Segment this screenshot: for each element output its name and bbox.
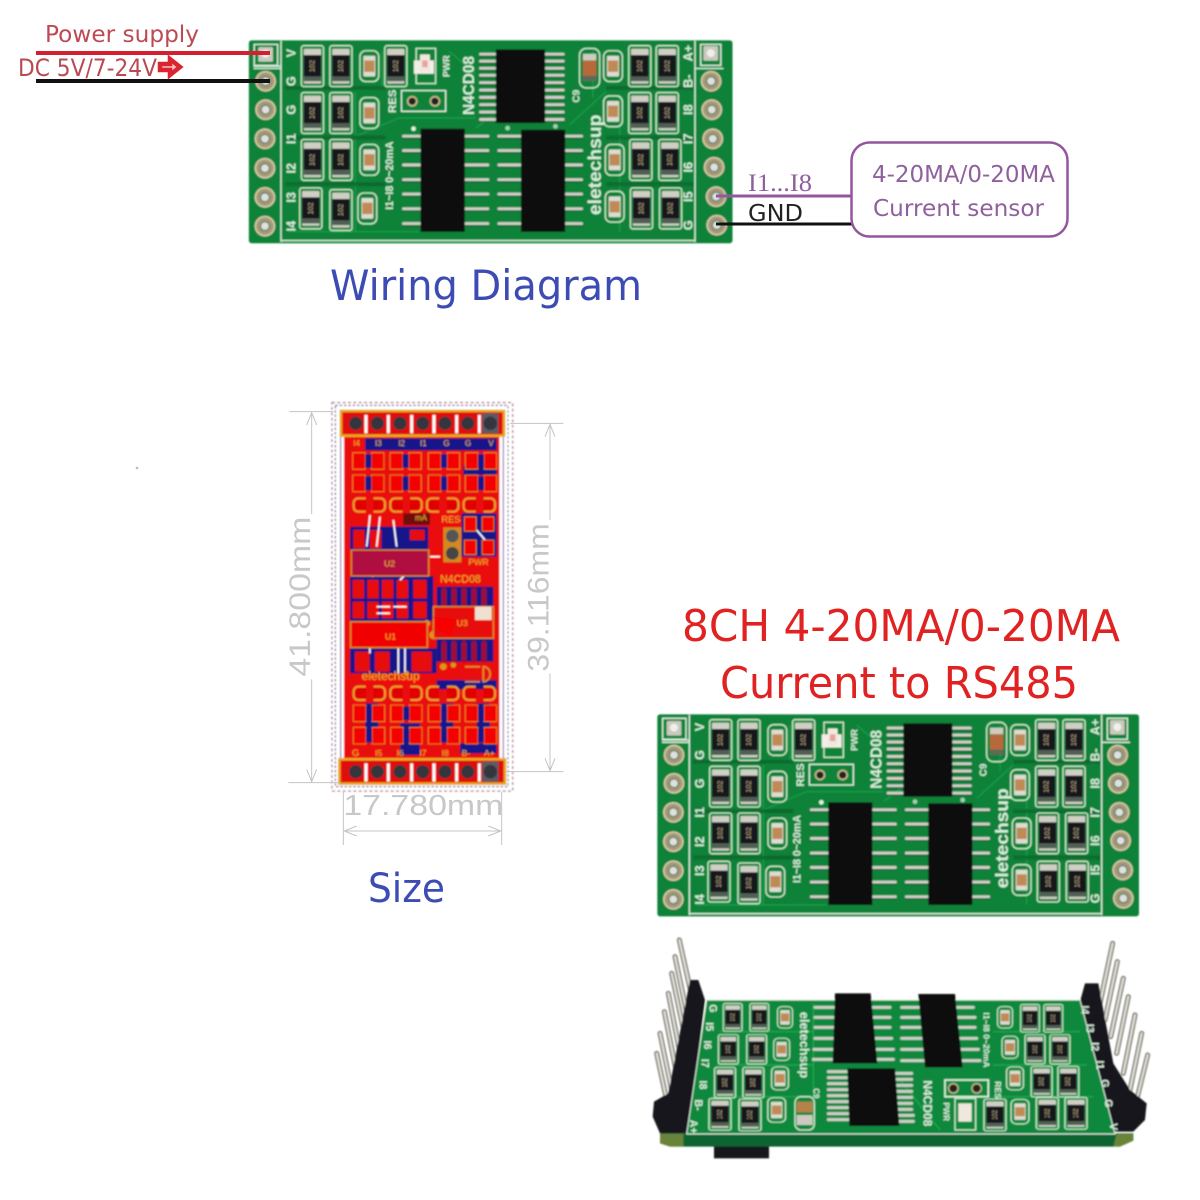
board edge [660,1133,1133,1147]
board labels: I3 [693,865,707,876]
left header block [653,980,705,1133]
voltage label: DC 5V/7-24V [18,54,158,82]
silkscreen labels: I7 [681,133,696,144]
layout silkscreen text: I7 [419,748,427,758]
pin rows [657,940,1148,1103]
board surface [687,1000,1115,1134]
perspective board labels: RES [993,1081,1003,1099]
sensor box [852,142,1068,236]
layout silkscreen text: RES [441,515,461,525]
board labels: I6 [1088,835,1102,846]
dimension lines [288,412,563,845]
IC chips [813,993,980,1126]
silkscreen labels: B- [681,75,696,88]
silkscreen labels: I5 [681,191,696,202]
perspective board labels: A+ [687,1120,699,1134]
pcb layout size drawing [284,403,563,845]
silkscreen labels: eletechsup [585,115,605,215]
photo: board perspective view with pin headers [653,940,1148,1158]
board labels: I5 [1088,865,1102,875]
perspective board labels: B- [692,1099,704,1111]
layout silkscreen text: I1 [420,439,427,448]
layout silkscreen text: N4CD08 [440,574,481,586]
connector under board [714,1145,769,1158]
perspective board labels: I4 [1079,1006,1091,1015]
layout silkscreen text: I8 [442,748,449,758]
silkscreen labels: N4CD08 [461,56,478,115]
layout silkscreen text: U1 [385,631,396,641]
layout silkscreen text: G [352,748,359,758]
silkscreen labels: I8 [681,104,696,115]
blocks over navy [353,530,432,672]
layout silkscreen text [352,439,495,758]
perspective board labels: I6 [701,1041,713,1050]
perspective board labels: C9 [811,1088,820,1099]
perspective board labels: V [1107,1123,1119,1131]
perspective board labels: I1~I8 0~20mA [981,1012,991,1068]
silkscreen labels: I4 [284,221,299,231]
red power wire [36,51,270,55]
board labels: I7 [1088,807,1102,818]
layout silkscreen text: I3 [375,439,382,448]
layout silkscreen text: A+ [484,748,495,758]
layout silkscreen text: I6 [397,748,404,758]
silkscreen labels: I3 [284,192,299,203]
layout silkscreen text: I5 [375,748,382,758]
photo: board top view [657,714,1139,916]
board labels: A+ [1088,719,1102,735]
silkscreen labels: G [284,105,299,115]
layout silkscreen text: U3 [457,618,468,628]
dimension: 17.780mm: 17.780mm [343,790,503,822]
silkscreen labels: I1~I8 0~20mA [384,141,396,210]
layout silkscreen text: mA [415,514,428,523]
layout silkscreen text: I4 [353,439,361,448]
silkscreen labels: RES [387,89,399,113]
silkscreen labels: A+ [681,45,696,61]
layout silkscreen text: PWR [468,557,489,567]
board labels: I4 [693,894,707,905]
power supply wires [18,22,270,82]
power supply label: Power supply [45,22,199,48]
perspective board labels: G [1102,1099,1114,1107]
perspective board labels: I5 [703,1022,715,1031]
signal wire [716,194,852,198]
perspective board labels: I3 [1084,1024,1096,1033]
board labels: I2 [693,836,707,847]
perspective board labels: I1 [1094,1061,1106,1070]
sensor range: 4-20MA/0-20MA [872,162,1055,188]
board labels: B- [1088,748,1102,762]
silkscreen labels: PWR [442,55,452,77]
heading: size: Size [368,866,445,912]
right header block [1080,983,1147,1132]
board labels: C9 [979,763,990,776]
board labels: RES [795,763,807,787]
board labels [693,719,1102,905]
title line 1: 8CH 4-20MA/0-20MA [682,601,1120,652]
pcb layout artwork [332,403,513,791]
layout silkscreen text: G [465,439,471,448]
perspective board labels: I8 [696,1081,708,1090]
black ground wire [36,79,270,83]
board labels: G [693,778,707,788]
layout silkscreen text: B- [462,748,470,758]
board labels: N4CD08 [868,729,885,789]
perspective board labels: G [706,1004,718,1012]
perspective board labels: I2 [1089,1042,1101,1051]
board labels: G [1088,893,1102,903]
silkscreen labels: G [284,76,299,86]
board labels: PWR [849,729,859,751]
stray dot [136,467,138,469]
heading: wiring diagram: Wiring Diagram [330,261,642,310]
perspective board labels: G [1099,1079,1111,1087]
ground wire [716,222,852,226]
ground label: GND [748,201,803,227]
silkscreen labels [284,45,696,231]
silkscreen labels: C9 [572,89,583,103]
board labels: V [693,722,707,731]
silkscreen labels: I2 [284,163,299,174]
title line 2: Current to RS485 [720,658,1078,709]
board labels: I8 [1088,778,1102,789]
board labels: G [693,750,707,760]
perspective board labels: eletechsup [797,1012,811,1078]
signal label: I1...I8 [748,170,812,197]
layout silkscreen text: G [443,439,450,448]
perspective board labels [687,1004,1119,1134]
silkscreen labels: V [284,48,299,57]
silkscreen labels: I1 [284,133,299,144]
current sensor wiring [716,142,1068,236]
dimension: 41.800mm: 41.800mm [284,517,317,677]
board labels: eletechsup [992,788,1012,888]
dimension: 39.116mm: 39.116mm [522,523,555,672]
board labels: I1~I8 0~20mA [792,815,804,883]
sensor name: Current sensor [873,196,1045,222]
layout silkscreen text: U2 [384,559,395,569]
silkscreen labels: I6 [681,162,696,173]
perspective board labels: N4CD08 [920,1080,934,1127]
icon: red arrow [160,59,180,75]
resistors and capacitors [709,1004,1087,1131]
perspective board labels: PWR [941,1102,950,1121]
perspective board labels: I7 [698,1059,710,1068]
board labels: I1 [693,807,707,818]
silkscreen labels: G [681,220,696,230]
layout silkscreen text: V [488,439,494,448]
layout silkscreen text: eletechsup [362,669,420,683]
layout silkscreen text: I2 [398,439,406,448]
photo: wiring diagram board [249,40,733,243]
